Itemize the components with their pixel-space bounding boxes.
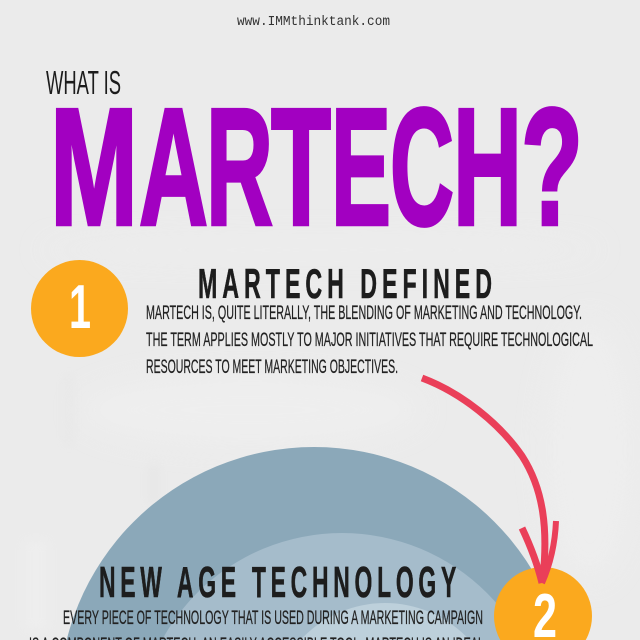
title: martech: H (453, 74, 522, 260)
concentric semicircles (59, 447, 569, 640)
step 1 badge (31, 260, 128, 357)
step 1 badge: 1 (69, 273, 91, 342)
title: martech: T (271, 74, 331, 260)
section 2 body text (29, 607, 484, 640)
title: martech: M (50, 74, 138, 260)
section 1 body text: RESOURCES TO MEET MARKETING OBJECTIVES. (146, 356, 398, 378)
title: martech: C (390, 74, 454, 260)
title: martech: A (139, 74, 208, 260)
title: martech (50, 74, 583, 260)
website url: www.IMMthinktank.com (237, 15, 390, 30)
title: martech: ? (521, 74, 583, 260)
section 1 body text (146, 302, 593, 378)
arrow: step 1 to step 2 (422, 378, 556, 583)
title: martech: R (206, 74, 273, 260)
title: martech: E (331, 74, 391, 260)
step 2 badge (494, 567, 592, 640)
heading: what is: WHAT IS (46, 65, 121, 102)
